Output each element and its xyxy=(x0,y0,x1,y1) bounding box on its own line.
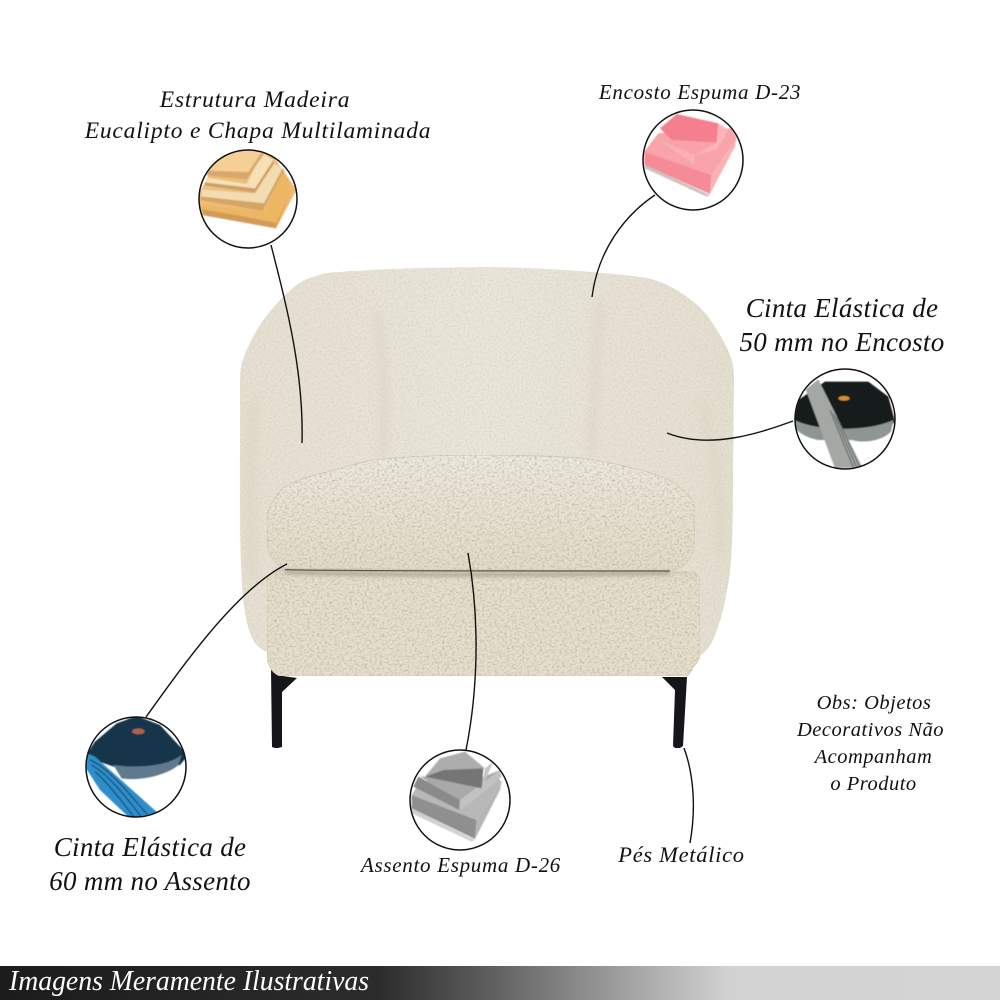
icon: plywood sheets xyxy=(197,147,297,228)
icon: pink foam xyxy=(644,114,737,197)
heading: assento: Assento Espuma D-26 xyxy=(359,853,561,877)
heading: cinta encosto: Cinta Elástica de xyxy=(746,293,938,323)
heading: estrutura: Estrutura Madeira xyxy=(159,87,350,113)
back folds shading xyxy=(250,300,720,580)
icon: black strap roll xyxy=(793,379,895,468)
heading: cinta encosto xyxy=(739,293,945,357)
note: decorative objects: Decorativos Não xyxy=(796,719,944,741)
seat cushion xyxy=(267,455,695,571)
icon ring xyxy=(643,110,743,210)
label: pés metálico: Pés Metálico xyxy=(617,842,745,867)
icon ring xyxy=(410,750,510,850)
footer text: Imagens Meramente Ilustrativas xyxy=(8,965,369,997)
callout: wood structure xyxy=(84,87,431,443)
leader line xyxy=(146,564,287,717)
leader line xyxy=(667,421,793,440)
icon: gray foam xyxy=(412,752,502,842)
heading: estrutura xyxy=(84,87,431,144)
callout: back elastic strap xyxy=(667,293,945,469)
seat crease line xyxy=(285,570,670,571)
chair legs xyxy=(271,670,687,748)
leader line xyxy=(466,553,476,750)
heading: cinta assento xyxy=(49,832,251,896)
armchair xyxy=(240,267,734,748)
leader line xyxy=(592,195,655,297)
callout: back foam xyxy=(592,80,801,297)
note: decorative objects: o Produto xyxy=(830,773,917,795)
leader line xyxy=(271,245,302,443)
heading: encosto: Encosto Espuma D-23 xyxy=(598,80,801,104)
icon: blue strap roll xyxy=(85,716,188,818)
heading: estrutura: Eucalipto e Chapa Multilaminada xyxy=(84,118,431,144)
footer bar xyxy=(0,965,1000,1000)
leader line xyxy=(684,748,693,843)
heading: cinta assento: Cinta Elástica de xyxy=(54,832,246,862)
note: decorative objects xyxy=(796,692,944,795)
icon ring xyxy=(199,150,297,248)
chair base xyxy=(267,568,700,676)
chair back and arms xyxy=(240,267,734,656)
heading: cinta encosto: 50 mm no Encosto xyxy=(739,327,945,357)
icon ring xyxy=(795,369,895,469)
heading: cinta assento: 60 mm no Assento xyxy=(49,866,251,896)
note: decorative objects: Obs: Objetos xyxy=(817,692,931,714)
callout: metal feet xyxy=(617,748,745,867)
note: decorative objects: Acompanham xyxy=(813,746,932,768)
callout: seat foam xyxy=(359,553,561,877)
seat underside shadow xyxy=(285,572,670,575)
callout: seat elastic strap xyxy=(49,564,287,896)
icon ring xyxy=(86,717,186,817)
